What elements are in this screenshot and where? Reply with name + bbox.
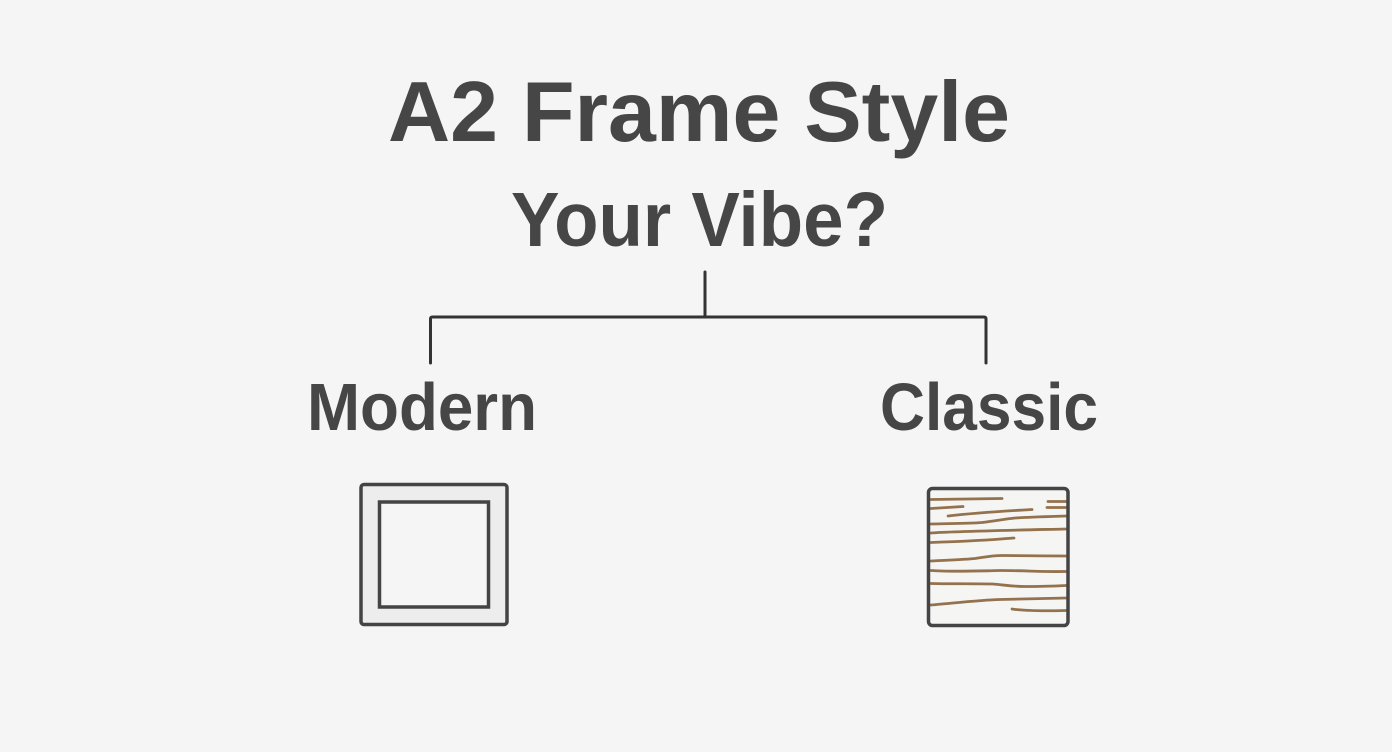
- subtitle question: Your Vibe?: [511, 177, 888, 263]
- title: A2 Frame Style: [388, 65, 1010, 160]
- icon: classic wood frame: [928, 488, 1068, 626]
- wood grain lines: [931, 498, 1066, 611]
- label: Modern: Modern: [307, 370, 537, 445]
- label: Classic: Classic: [880, 370, 1098, 445]
- icon: modern frame: [361, 484, 507, 624]
- frame outline: [928, 488, 1068, 626]
- tree connector: [430, 272, 986, 363]
